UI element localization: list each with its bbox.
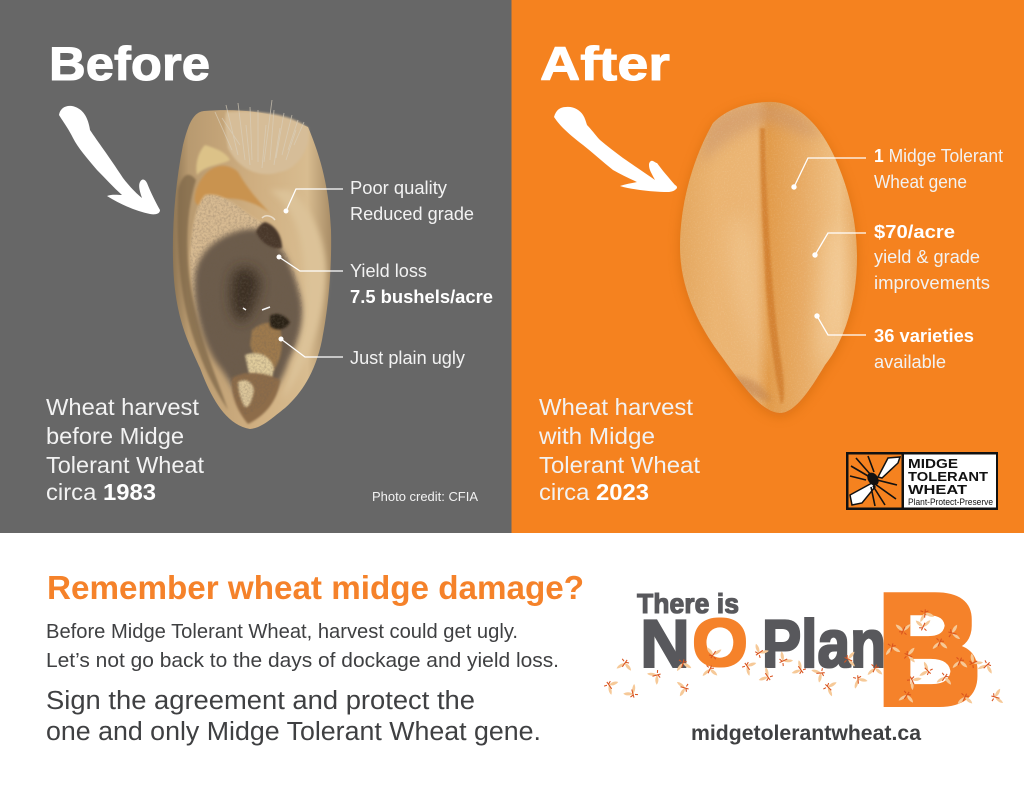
text: before caption (46, 394, 204, 505)
text: before caption: Tolerant Wheat (46, 452, 204, 478)
callout: quality (350, 178, 474, 224)
heading: Before: Before (49, 37, 210, 90)
text: after caption: Wheat harvest (539, 394, 693, 420)
callout: one gene: 1 Midge Tolerant (874, 146, 1003, 166)
image: healthy wheat kernel (675, 100, 865, 416)
text: after caption: Tolerant Wheat (539, 452, 700, 478)
logo: There is No Plan B: B (877, 562, 981, 738)
callout: one gene (874, 146, 1003, 192)
arrow: after (554, 107, 677, 192)
callout: value per acre: yield & grade (874, 247, 980, 267)
callout: yield loss: 7.5 bushels/acre (350, 287, 493, 307)
text block: intro: Let’s not go back to the days of dockage and yield loss. (46, 649, 559, 672)
midges swarm (603, 606, 1007, 708)
text: before caption: before Midge (46, 423, 184, 449)
logo: Midge Tolerant Wheat: MIDGE (908, 457, 958, 471)
text block: intro: Before Midge Tolerant Wheat, harvest could get ugly. (46, 620, 518, 643)
logo: Midge Tolerant Wheat (846, 452, 998, 510)
logo: There is No Plan B: There is (637, 588, 739, 619)
logo: There is No Plan B (603, 562, 1007, 738)
callout: yield loss (350, 261, 493, 307)
icon: midge (850, 456, 900, 506)
panel: after background (512, 0, 1024, 533)
callout dots: before (276, 208, 288, 342)
text block: intro (46, 620, 559, 672)
panel: before background (0, 0, 512, 533)
callout: quality: Poor quality (350, 178, 447, 198)
callout: value per acre: $70/acre (874, 222, 955, 242)
text block: call to action (46, 687, 541, 746)
text: before caption: circa 1983 (46, 479, 156, 505)
panel: lower white section (0, 533, 1024, 791)
callout: value per acre (874, 222, 990, 293)
text: website: midgetolerantwheat.ca (691, 722, 921, 745)
arrow: before (59, 106, 160, 214)
text: after caption: with Midge (538, 423, 655, 449)
text: after caption: circa 2023 (539, 479, 649, 505)
callout: ugly: Just plain ugly (350, 348, 465, 368)
callout: yield loss: Yield loss (350, 261, 427, 281)
callout dots: after (791, 184, 820, 319)
logo: Midge Tolerant Wheat: TOLERANT (908, 470, 988, 484)
logo: There is No Plan B: O (692, 605, 748, 681)
callout: varieties: 36 varieties (874, 326, 974, 346)
callout: quality: Reduced grade (350, 204, 474, 224)
logo: There is No Plan B: N (640, 606, 690, 682)
logo: Midge Tolerant Wheat: Plant-Protect-Preserve (908, 497, 993, 507)
logo: There is No Plan B: Plan (762, 606, 886, 682)
text: photo credit: Photo credit: CFIA (372, 489, 478, 504)
heading: Remember wheat midge damage: Remember wheat midge damage? (47, 569, 584, 606)
callout: varieties: available (874, 352, 946, 372)
logo: Midge Tolerant Wheat: WHEAT (908, 483, 967, 497)
image: damaged wheat kernel (173, 100, 331, 429)
text block: call to action: Sign the agreement and protect the (46, 687, 475, 715)
text: before caption: Wheat harvest (46, 394, 199, 420)
callout: varieties (874, 326, 974, 372)
text block: call to action: one and only Midge Tolerant Wheat gene. (46, 718, 541, 746)
leader lines: before (279, 189, 343, 357)
leader lines: after (794, 158, 866, 335)
hairs (215, 100, 304, 168)
heading: After: After (540, 37, 670, 90)
callout: one gene: Wheat gene (874, 172, 967, 192)
callout: value per acre: improvements (874, 273, 990, 293)
text: after caption (538, 394, 700, 505)
